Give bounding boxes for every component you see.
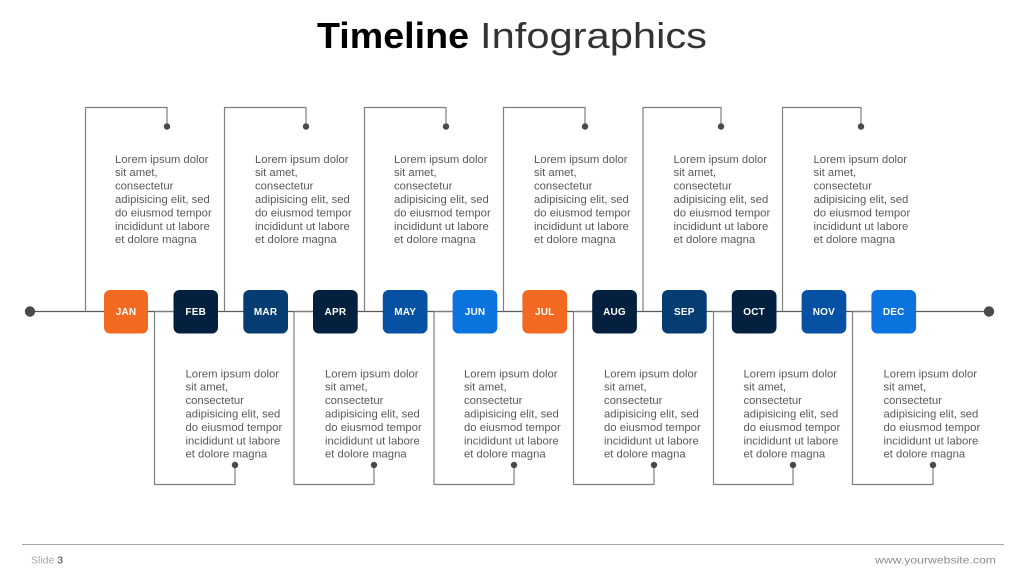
panel: August note [574, 312, 701, 484]
panel: January note: incididunt ut labore [115, 221, 210, 233]
panel: September note: et dolore magna [674, 234, 756, 246]
month badge: SEP: SEP [674, 307, 695, 318]
month badge: FEB: FEB [185, 307, 206, 318]
panel: October note: Lorem ipsum dolor [744, 368, 837, 380]
title: Infographics [480, 15, 707, 56]
panel: November note: sit amet, [814, 167, 856, 179]
title [317, 15, 707, 56]
panel: June note: do eiusmod tempor [464, 422, 561, 434]
panel: October note: sit amet, [744, 382, 786, 394]
panel: April note: sit amet, [325, 382, 368, 394]
panel: March note: do eiusmod tempor [255, 208, 352, 220]
panel: September note: consectetur [674, 180, 732, 192]
panel: May note: sit amet, [394, 167, 437, 179]
panel: October note: incididunt ut labore [744, 436, 838, 448]
panel: November note: incididunt ut labore [814, 221, 908, 233]
panel: May note: et dolore magna [394, 234, 476, 246]
panel: October note: consectetur [744, 395, 802, 407]
panel: November note: et dolore magna [814, 234, 896, 246]
month badge: JUL [522, 290, 567, 334]
panel: March note: et dolore magna [255, 234, 337, 246]
panel: June note: incididunt ut labore [464, 436, 559, 448]
panel: September note: Lorem ipsum dolor [674, 154, 767, 166]
month badge: JUN: JUN [465, 307, 485, 318]
month badge: MAY [383, 290, 428, 334]
panel: March note: consectetur [255, 180, 314, 192]
month badge: OCT: OCT [743, 307, 765, 318]
panel: April note: consectetur [325, 395, 384, 407]
panel: September note: incididunt ut labore [674, 221, 768, 233]
panel: July note [504, 108, 631, 312]
panel: February note: consectetur [186, 395, 244, 407]
panel: May note: Lorem ipsum dolor [394, 154, 488, 166]
panel: December note [852, 312, 980, 484]
month badge: MAY: MAY [394, 307, 416, 318]
panel: December note: Lorem ipsum dolor [884, 368, 977, 380]
panel: August note: Lorem ipsum dolor [604, 368, 698, 380]
panel: January note: Lorem ipsum dolor [115, 154, 209, 166]
panel: July note: sit amet, [534, 167, 577, 179]
footer: website: www.yourwebsite.com [874, 554, 996, 566]
panel: July note: adipisicing elit, sed [534, 194, 629, 206]
panel: March note: sit amet, [255, 167, 298, 179]
panel: January note [86, 108, 212, 312]
month badge: JAN [104, 290, 148, 334]
month badge: MAR [243, 290, 288, 334]
month badge: APR [313, 290, 358, 334]
panel: January note: adipisicing elit, sed [115, 194, 210, 206]
month badge: APR: APR [325, 307, 347, 318]
title: Timeline [317, 15, 469, 56]
panel: January note: sit amet, [115, 167, 158, 179]
panel: October note [714, 312, 840, 484]
panel: February note: sit amet, [186, 382, 228, 394]
panel: December note: incididunt ut labore [884, 436, 978, 448]
panel: November note: consectetur [814, 180, 872, 192]
panel: November note: Lorem ipsum dolor [814, 154, 907, 166]
panel: July note: do eiusmod tempor [534, 208, 631, 220]
panel: June note: et dolore magna [464, 448, 546, 460]
panel: July note: consectetur [534, 180, 593, 192]
panel: May note: incididunt ut labore [394, 221, 489, 233]
panel: February note: do eiusmod tempor [186, 422, 282, 434]
panel: May note: consectetur [394, 180, 453, 192]
month badge: NOV [802, 290, 846, 334]
panel: April note [294, 312, 422, 484]
panel: December note: consectetur [884, 395, 942, 407]
panel: July note: incididunt ut labore [534, 221, 629, 233]
panel: March note [224, 108, 352, 312]
panel: September note: do eiusmod tempor [674, 208, 770, 220]
panel: September note [643, 108, 770, 312]
panel: May note: do eiusmod tempor [394, 208, 491, 220]
panel: August note: incididunt ut labore [604, 436, 699, 448]
month badge: MAR: MAR [254, 307, 278, 318]
panel: August note: sit amet, [604, 382, 647, 394]
panel: June note: consectetur [464, 395, 523, 407]
panel: February note [154, 312, 282, 484]
panel: January note: do eiusmod tempor [115, 208, 212, 220]
panel: November note: do eiusmod tempor [814, 208, 910, 220]
panel: February note: incididunt ut labore [186, 436, 280, 448]
month badge: JUN [453, 290, 497, 334]
panel: March note: Lorem ipsum dolor [255, 154, 349, 166]
footer: slide number: Slide 3 [31, 554, 63, 566]
panel: December note: adipisicing elit, sed [884, 408, 978, 420]
month badge: AUG: AUG [603, 307, 626, 318]
panel: May note: adipisicing elit, sed [394, 194, 489, 206]
panel: April note: do eiusmod tempor [325, 422, 422, 434]
panel: February note: et dolore magna [186, 448, 268, 460]
timeline axis [25, 306, 994, 317]
panel: September note: sit amet, [674, 167, 716, 179]
panel: July note: et dolore magna [534, 234, 616, 246]
panel: October note: adipisicing elit, sed [744, 408, 838, 420]
panel: March note: adipisicing elit, sed [255, 194, 350, 206]
panel: August note: et dolore magna [604, 448, 686, 460]
panel: November note: adipisicing elit, sed [814, 194, 908, 206]
panel: August note: adipisicing elit, sed [604, 408, 699, 420]
panel: June note: adipisicing elit, sed [464, 408, 559, 420]
month badge: AUG [592, 290, 637, 334]
panel: April note: adipisicing elit, sed [325, 408, 420, 420]
panel: April note: et dolore magna [325, 448, 407, 460]
panel: June note: Lorem ipsum dolor [464, 368, 558, 380]
panel: April note: incididunt ut labore [325, 436, 420, 448]
panel: February note: Lorem ipsum dolor [186, 368, 279, 380]
panel: June note: sit amet, [464, 382, 507, 394]
panel: June note [434, 312, 561, 484]
panel: February note: adipisicing elit, sed [186, 408, 280, 420]
month badge: SEP [662, 290, 707, 334]
panel: October note: do eiusmod tempor [744, 422, 840, 434]
panel: November note [782, 108, 910, 312]
panel: January note: consectetur [115, 180, 174, 192]
panel: August note: do eiusmod tempor [604, 422, 701, 434]
month badge: JUL: JUL [535, 307, 554, 318]
month badge: NOV: NOV [813, 307, 835, 318]
month badge: OCT [732, 290, 776, 334]
panel: January note: et dolore magna [115, 234, 197, 246]
panel: December note: sit amet, [884, 382, 926, 394]
month badge: DEC [871, 290, 916, 334]
panel: March note: incididunt ut labore [255, 221, 350, 233]
panel: October note: et dolore magna [744, 448, 826, 460]
panel: December note: do eiusmod tempor [884, 422, 980, 434]
panel: December note: et dolore magna [884, 448, 966, 460]
panel: April note: Lorem ipsum dolor [325, 368, 419, 380]
panel: September note: adipisicing elit, sed [674, 194, 768, 206]
panel: July note: Lorem ipsum dolor [534, 154, 628, 166]
month badge: FEB [174, 290, 218, 334]
month badge: DEC: DEC [883, 307, 905, 318]
panel: August note: consectetur [604, 395, 663, 407]
panel: May note [364, 108, 491, 312]
month badge: JAN: JAN [116, 307, 136, 318]
